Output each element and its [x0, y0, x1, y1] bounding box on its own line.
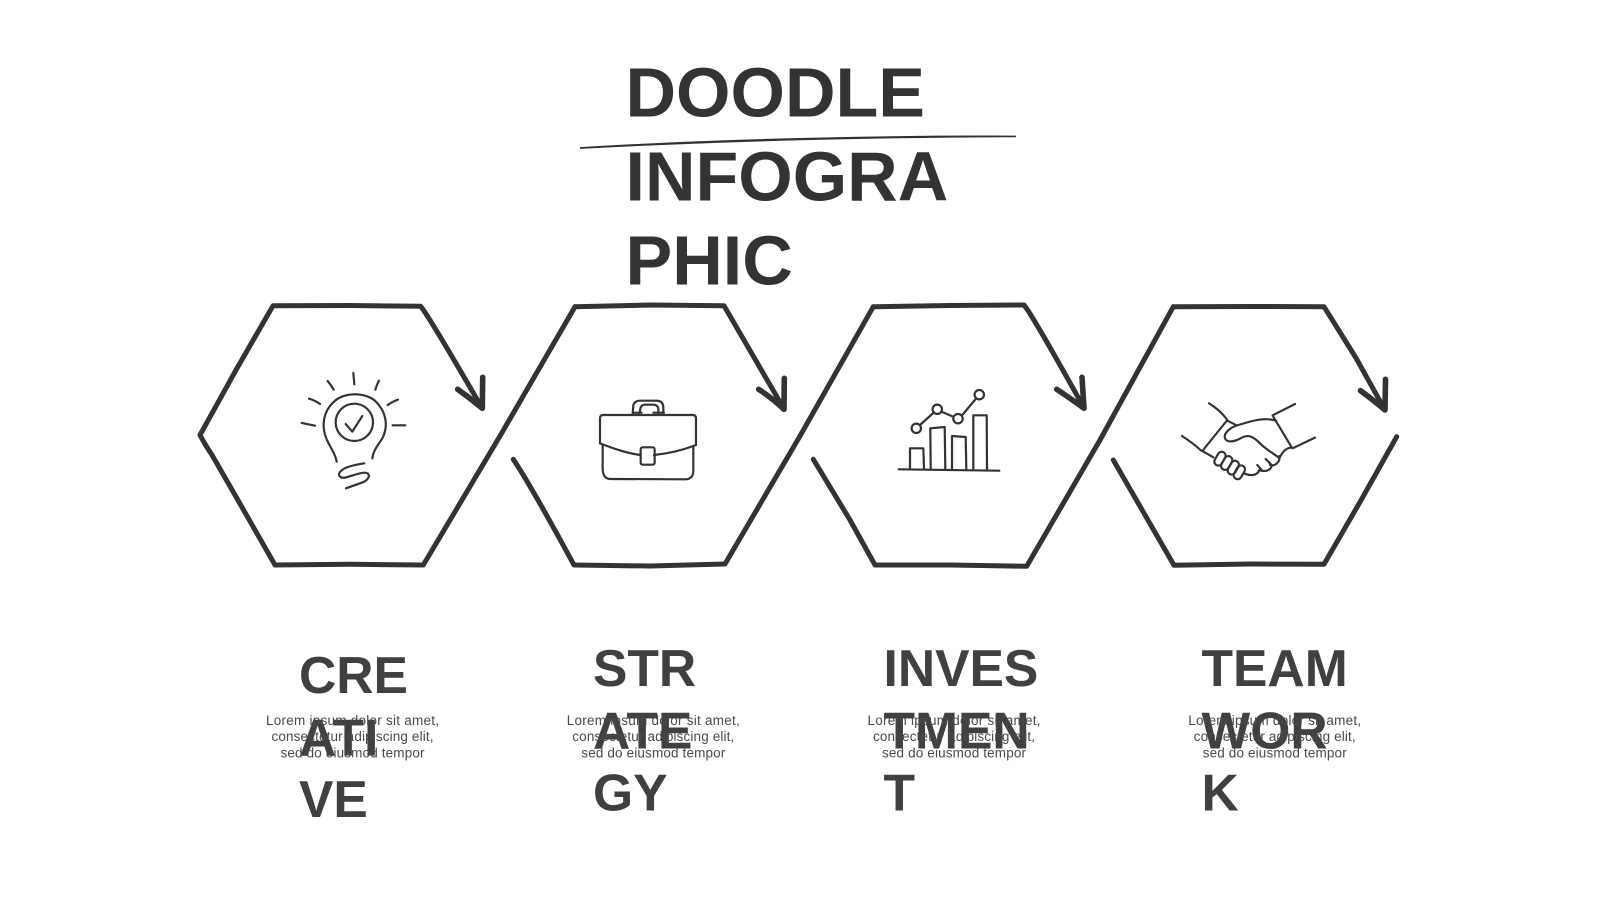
text block: teamwork: sed do eiusmod tempor	[1203, 745, 1347, 760]
heading: teamwork: TEAM	[1202, 639, 1348, 697]
heading: investment: TMEN	[884, 702, 1030, 760]
text block: teamwork: consectetur adipiscing elit,	[1194, 729, 1356, 744]
heading: investment: T	[884, 764, 915, 822]
icon: bar chart	[899, 390, 999, 471]
panel: teamwork	[1113, 306, 1397, 822]
icon: light bulb	[302, 373, 405, 488]
text block: investment: consectetur adipiscing elit,	[873, 729, 1035, 744]
heading: strategy: STR	[593, 639, 696, 697]
text block: strategy: Lorem ipsum dolor sit amet,	[567, 713, 740, 728]
heading: creative: ATI	[299, 708, 378, 766]
heading: teamwork: WOR	[1202, 702, 1328, 760]
text block: teamwork: Lorem ipsum dolor sit amet,	[1188, 713, 1361, 728]
panel: strategy	[513, 305, 873, 822]
panel: creative	[200, 306, 575, 828]
panel: investment	[813, 305, 1173, 822]
heading: strategy: ATE	[593, 702, 692, 760]
text block: investment: sed do eiusmod tempor	[882, 745, 1026, 760]
text block: creative: consectetur adipiscing elit,	[272, 729, 434, 744]
text block: strategy: sed do eiusmod tempor	[581, 745, 726, 760]
text block: creative: Lorem ipsum dolor sit amet,	[266, 713, 439, 728]
title: DOODLE	[626, 54, 925, 132]
title: INFOGRA	[626, 138, 948, 216]
hexagon arrow 3	[813, 305, 1173, 566]
heading: teamwork: K	[1202, 764, 1239, 822]
text block: investment: Lorem ipsum dolor sit amet,	[868, 713, 1040, 728]
hexagon arrow 4	[1113, 306, 1397, 565]
hexagon arrow 2	[513, 305, 873, 566]
text block: strategy: consectetur adipiscing elit,	[572, 729, 734, 744]
title underline	[580, 136, 1016, 148]
icon: handshake	[1182, 403, 1315, 481]
heading: strategy: GY	[593, 764, 668, 822]
hexagon arrow 1	[200, 306, 575, 565]
text block: creative: sed do eiusmod tempor	[280, 745, 425, 760]
icon: briefcase	[600, 401, 696, 479]
heading: creative: VE	[299, 770, 368, 828]
title: PHIC	[626, 222, 793, 300]
heading: creative: CRE	[299, 646, 408, 704]
heading: investment: INVES	[884, 639, 1038, 697]
